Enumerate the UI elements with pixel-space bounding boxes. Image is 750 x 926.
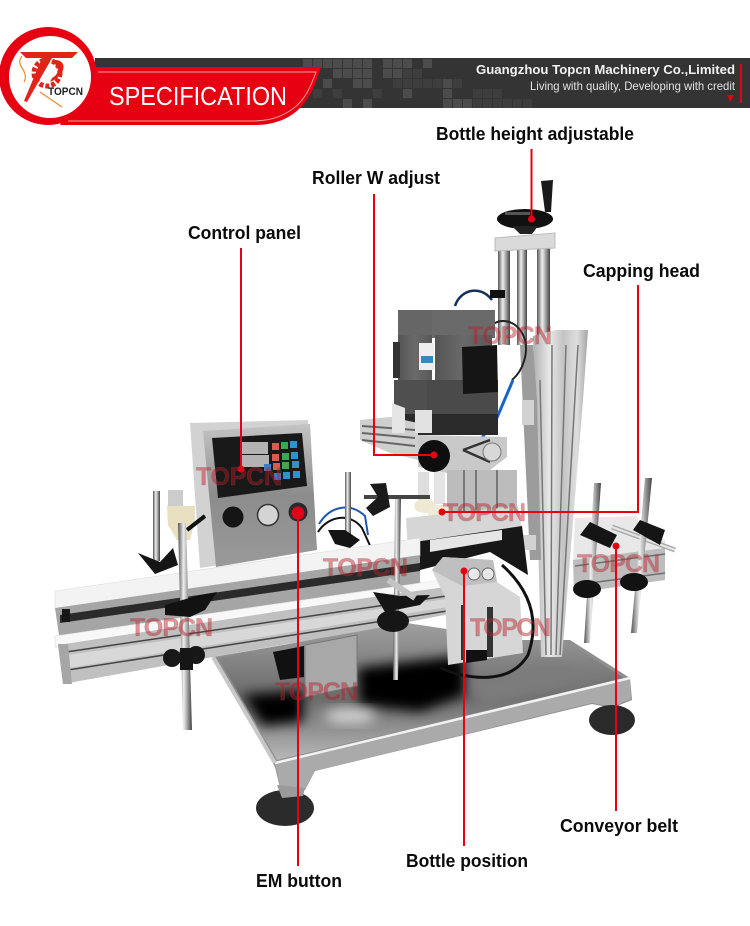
callout: EM button: EM button [256, 871, 342, 891]
right conveyor section [573, 516, 675, 593]
company name and slogan: Guangzhou Topcn Machinery Co.,Limited [476, 62, 735, 77]
watermarks: TOPCN [196, 463, 282, 491]
LED displays [240, 442, 269, 467]
watermarks: TOPCN [577, 550, 660, 578]
rotary switch [222, 506, 244, 528]
left foot [256, 785, 314, 826]
callout: capping head [438, 261, 700, 516]
callout: roller W adjust [312, 168, 440, 458]
header band [95, 58, 750, 108]
cables left of head [318, 508, 372, 550]
cross shaft and clamp [364, 483, 430, 516]
back conveyor rail [55, 538, 420, 642]
base tray [213, 622, 632, 790]
logo badge [0, 27, 97, 125]
logo wordmark: TOPCN [48, 86, 83, 98]
watermarks: TOPCN [470, 614, 551, 642]
callout: conveyor belt: Conveyor belt [560, 816, 678, 836]
callout: conveyor belt [560, 542, 678, 836]
front rod and clamp middle [373, 499, 430, 680]
front rod and clamp left [163, 523, 217, 730]
pressure gauge [258, 504, 278, 526]
regulator [167, 490, 205, 540]
callout: bottle position: Bottle position [406, 851, 528, 871]
callout: control panel: Control panel [188, 223, 301, 243]
watermarks: TOPCN [468, 322, 552, 350]
emergency stop button [288, 502, 308, 522]
callout: bottle height adjustable: Bottle height adjustable [436, 124, 634, 144]
black cable [440, 565, 533, 677]
watermarks: TOPCN [130, 614, 213, 642]
centre support box [273, 635, 357, 697]
capping slide frame [414, 470, 517, 526]
top crossbar [495, 233, 555, 251]
right foot [589, 705, 635, 735]
watermarks: TOPCN [443, 499, 526, 527]
callout: capping head: Capping head [583, 261, 700, 281]
callout: roller W adjust: Roller W adjust [312, 168, 440, 188]
company name and slogan: Living with quality, Developing with credit [530, 79, 736, 93]
callout: bottle position [406, 568, 528, 871]
company name and slogan [476, 62, 736, 93]
red title ribbon [60, 67, 321, 125]
control box [190, 420, 317, 568]
blue air tube [480, 380, 513, 440]
callout: bottle height adjustable [436, 124, 634, 222]
right guide rods [573, 478, 665, 643]
front conveyor belt [55, 578, 460, 684]
roller width carriage [360, 403, 498, 460]
callout: EM button [256, 510, 342, 891]
watermarks [130, 322, 660, 706]
handwheel [497, 180, 553, 234]
cable loop [455, 290, 526, 380]
capping head plate [418, 435, 507, 473]
watermarks: TOPCN [323, 554, 408, 582]
callout: control panel [188, 223, 301, 472]
aluminium column [520, 330, 588, 657]
vertical rods [498, 245, 550, 345]
logo swoosh [20, 56, 62, 107]
logo gear [34, 60, 60, 86]
watermarks: TOPCN [275, 678, 358, 706]
bottle stop cylinder [432, 557, 523, 665]
logo T mark [20, 52, 78, 102]
back clamps and rods [138, 472, 360, 574]
adjustment knob [418, 440, 450, 472]
header accent bar and marker [727, 64, 742, 103]
table and slide [406, 506, 528, 575]
capping machine [55, 180, 675, 826]
motors [393, 310, 498, 417]
keypad [264, 441, 300, 480]
section title: SPECIFICATION [109, 81, 287, 111]
